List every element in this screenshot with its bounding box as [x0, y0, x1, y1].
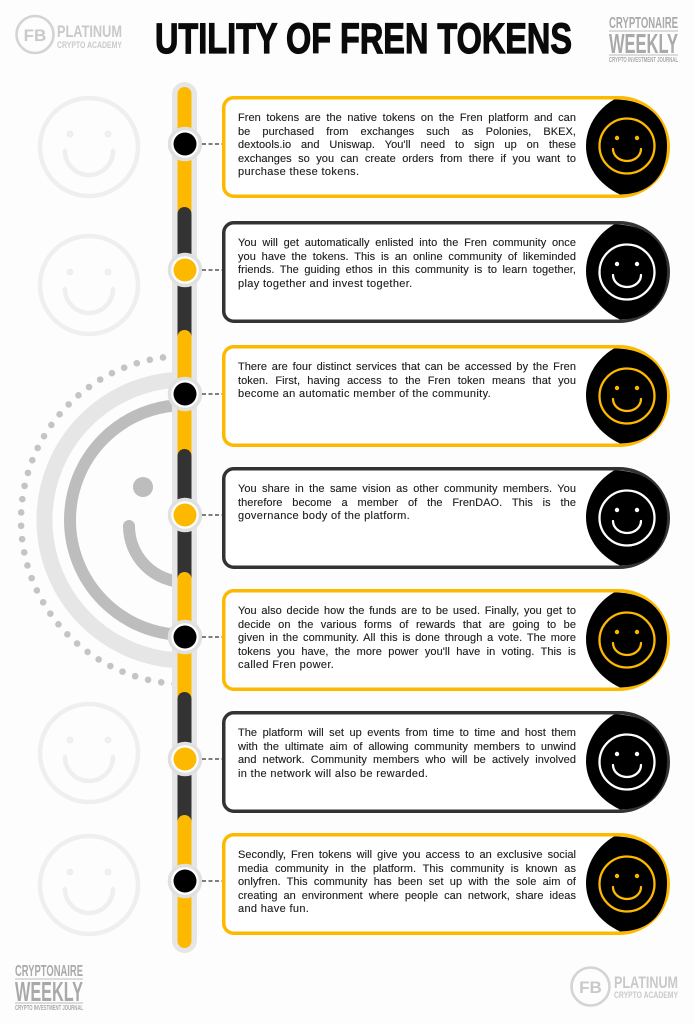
text: card 6: and network. Community members who will be actively involved — [238, 754, 576, 766]
text: card 1 — [238, 112, 576, 178]
text: card 6: in the network will also be rewarded. — [238, 768, 428, 780]
panel: card 2 — [222, 221, 670, 323]
logo: Cryptonaire Weekly bottom left: CRYPTONAIRE — [15, 963, 83, 980]
text: card 3: token. First, having access to the Fren token means that you — [238, 374, 576, 386]
text: card 7 — [238, 849, 576, 915]
text: card 5 — [238, 605, 576, 671]
node 6 — [170, 744, 222, 774]
text: card 4: governance body of the platform. — [238, 510, 410, 522]
text: card 7: Secondly, Fren tokens will give you access to an exclusive social — [238, 849, 576, 861]
text: card 4: You share in the same vision as other community members. You — [238, 483, 576, 495]
timeline spine — [172, 82, 197, 953]
logo: Platinum Crypto Academy top left: FB — [24, 26, 46, 45]
panel: card 5 — [222, 589, 670, 691]
logo: Platinum Crypto Academy bottom right — [572, 968, 678, 1006]
text: card 7: media community in the platform. This community is known as — [238, 862, 576, 874]
text: card 5: decide on the various forms of rewards that are going to be — [238, 618, 576, 630]
text: card 7: creating an environment where people can network, share ideas — [238, 890, 576, 902]
logo: Platinum Crypto Academy bottom right: FB — [579, 978, 602, 997]
icon: faded smiley 1 — [40, 98, 138, 196]
node 2 — [170, 254, 222, 286]
text: card 1: be purchased from exchanges such as Polonies, BKEX, — [238, 126, 576, 138]
text: card 3: become an automatic member of the community. — [238, 388, 491, 400]
text: card 5: You also decide how the funds are to be used. Finally, you get to — [238, 605, 576, 617]
panel: card 3 — [222, 345, 670, 447]
icon: faded smiley 3 — [40, 704, 138, 802]
text: card 5: tokens you have, the more power you'll have in voting. This is — [238, 646, 576, 658]
icon: large half smiley — [18, 354, 172, 686]
node 4 — [170, 500, 222, 530]
text: card 2: friends. The guiding ethos in this community is to learn together, — [238, 264, 576, 276]
text: card 6 — [238, 727, 576, 780]
text: card 1: purchase these tokens. — [238, 166, 359, 178]
panel: card 4 — [222, 467, 670, 569]
title: UTILITY OF FREN TOKENS — [155, 15, 572, 63]
text: card 6: with the ultimate aim of allowing community members to unwind — [238, 740, 576, 752]
text: card 1: dextools.io and Uniswap. You'll need to sign up on these — [238, 139, 576, 151]
node 1 — [170, 128, 222, 160]
text: card 3 — [238, 361, 576, 400]
text: card 4: therefore become a member of the FrenDAO. This is the — [238, 496, 576, 508]
text: card 1: Fren tokens are the native tokens on the Fren platform and can — [238, 112, 576, 124]
text: card 6: The platform will set up events from time to time and host them — [238, 727, 576, 739]
logo: Platinum Crypto Academy top left — [16, 16, 122, 53]
panel: card 7 — [222, 833, 670, 935]
text: card 2: play together and invest together. — [238, 278, 413, 290]
logo: Cryptonaire Weekly bottom left — [15, 963, 83, 1012]
panel: card 6 — [222, 711, 670, 813]
icon: faded smiley 2 — [40, 236, 138, 334]
logo: Platinum Crypto Academy top left: CRYPTO ACADEMY — [57, 40, 122, 50]
node 5 — [170, 622, 222, 652]
logo: Platinum Crypto Academy top left: PLATINUM — [57, 23, 122, 41]
logo: Cryptonaire Weekly bottom left: WEEKLY — [15, 976, 83, 1007]
icon: faded smiley 4 — [40, 836, 138, 934]
text: card 2: you have the tokens. This is an online community of likeminded — [238, 250, 576, 262]
text: card 1: exchanges so you can create orders from there if you want to — [238, 152, 576, 164]
text: card 7: and have fun. — [238, 903, 309, 915]
text: card 7: onlyfren. This community has been set up with the sole aim of — [238, 876, 576, 888]
node 7 — [170, 866, 222, 896]
text: card 5: given in the community. All this is done through a vote. The more — [238, 632, 576, 644]
text: card 4 — [238, 483, 576, 522]
text: card 2 — [238, 237, 576, 290]
panel: card 1 — [222, 96, 670, 198]
logo: Cryptonaire Weekly top right — [609, 15, 678, 64]
logo: Cryptonaire Weekly bottom left: CRYPTO INVESTMENT JOURNAL — [15, 1005, 83, 1012]
text: card 2: You will get automatically enlisted into the Fren community once — [238, 237, 576, 249]
node 3 — [170, 378, 222, 410]
text: card 5: called Fren power. — [238, 659, 334, 671]
text: card 3: There are four distinct services that can be accessed by the Fren — [238, 361, 576, 373]
